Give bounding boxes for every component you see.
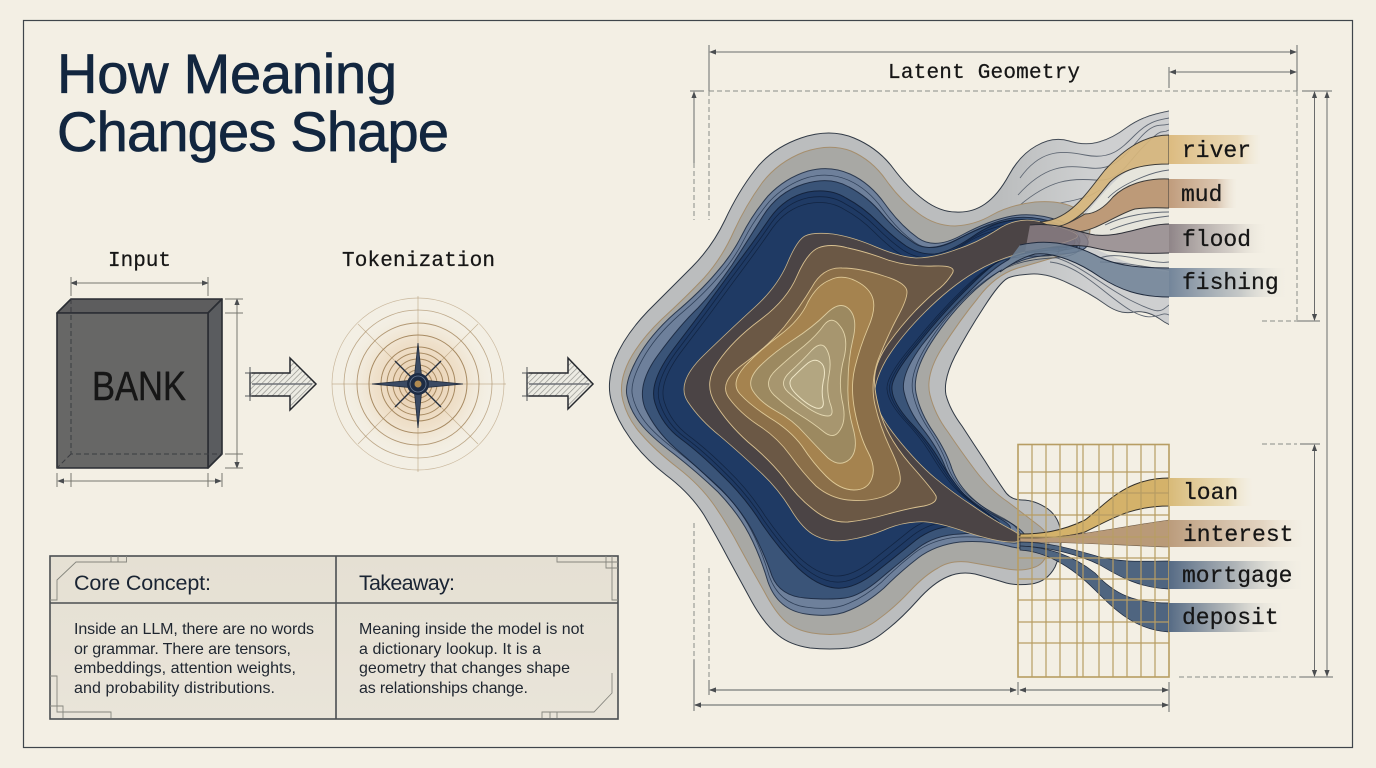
panel: concept and takeaway bbox=[50, 556, 618, 719]
heading: latent geometry: Latent Geometry bbox=[888, 62, 1080, 85]
heading: core concept: Core Concept: bbox=[74, 571, 211, 595]
icon: bank cube: BANK bbox=[92, 363, 186, 409]
tokenization stage bbox=[332, 250, 506, 472]
text: core concept body bbox=[74, 621, 314, 697]
label: deposit: deposit bbox=[1182, 605, 1279, 631]
stream: loan bbox=[1020, 478, 1169, 538]
text: core concept body: embeddings, attention weights, bbox=[74, 660, 296, 677]
text: takeaway body: a dictionary lookup. It is a bbox=[359, 641, 541, 658]
text: takeaway body: as relationships change. bbox=[359, 680, 528, 697]
title: How Meaning bbox=[57, 42, 397, 105]
brown contour bbox=[710, 246, 953, 522]
center contour bbox=[790, 360, 824, 408]
stream: interest bbox=[1020, 520, 1169, 547]
title: Changes Shape bbox=[57, 100, 449, 163]
label: mud bbox=[1169, 179, 1237, 208]
input stage bbox=[57, 250, 243, 487]
icon: bank cube bbox=[57, 299, 222, 468]
label: loan: loan bbox=[1183, 480, 1238, 506]
title bbox=[57, 42, 449, 163]
light blue contour bbox=[626, 169, 1088, 615]
stream: river bbox=[1040, 135, 1169, 228]
label: interest: interest bbox=[1183, 522, 1293, 548]
stream: deposit bbox=[1020, 546, 1169, 632]
label: mortgage: mortgage bbox=[1182, 563, 1292, 589]
navy contour bbox=[654, 191, 1075, 588]
stream: fishing bbox=[1000, 242, 1169, 297]
label: river bbox=[1169, 135, 1261, 164]
stream: mortgage bbox=[1020, 542, 1169, 589]
label: flood: flood bbox=[1182, 227, 1251, 253]
stream: mud bbox=[1060, 179, 1169, 232]
heading: input: Input bbox=[108, 250, 171, 273]
outer gray contour with upper stream bbox=[609, 108, 1200, 649]
dimensions around cube bbox=[57, 277, 243, 487]
label: loan bbox=[1169, 478, 1253, 506]
dimension lines: latent geometry bbox=[690, 45, 1333, 712]
text: takeaway body bbox=[359, 621, 585, 697]
tan-lined gray contour bbox=[621, 147, 1090, 634]
upper streams bbox=[1000, 135, 1169, 297]
chart: latent geometry contour blob bbox=[609, 100, 1200, 649]
arrow: tokenization to latent geometry bbox=[522, 358, 593, 409]
label: river: river bbox=[1182, 138, 1251, 164]
tan grid bbox=[1018, 444, 1169, 677]
khaki contour bbox=[751, 305, 855, 463]
text: takeaway body: Meaning inside the model is not bbox=[359, 621, 585, 638]
mid blue contour bbox=[642, 181, 1080, 599]
label: flood bbox=[1169, 224, 1267, 253]
text: takeaway body: geometry that changes shape bbox=[359, 660, 570, 677]
text: core concept body: or grammar. There are tensors, bbox=[74, 641, 291, 658]
label: fishing: fishing bbox=[1182, 270, 1279, 296]
light gaps between upper streams bbox=[1086, 164, 1169, 268]
tan contour bbox=[736, 277, 874, 490]
text: core concept body: Inside an LLM, there are no words bbox=[74, 621, 314, 638]
heading: takeaway: Takeaway: bbox=[359, 571, 455, 595]
warm brown contour bbox=[726, 268, 907, 501]
wave lines in gray stream bbox=[1000, 118, 1169, 317]
stream: flood bbox=[1025, 224, 1169, 253]
icon: radial token star bbox=[332, 296, 506, 472]
label: mud: mud bbox=[1181, 182, 1222, 208]
pale contour bbox=[768, 320, 846, 436]
lower streams bbox=[1020, 478, 1169, 632]
paler contour bbox=[783, 345, 832, 416]
heading: tokenization: Tokenization bbox=[342, 250, 495, 273]
text: core concept body: and probability distributions. bbox=[74, 680, 275, 697]
dark brown contour bbox=[684, 220, 1077, 542]
arrow: input to tokenization bbox=[245, 358, 316, 410]
